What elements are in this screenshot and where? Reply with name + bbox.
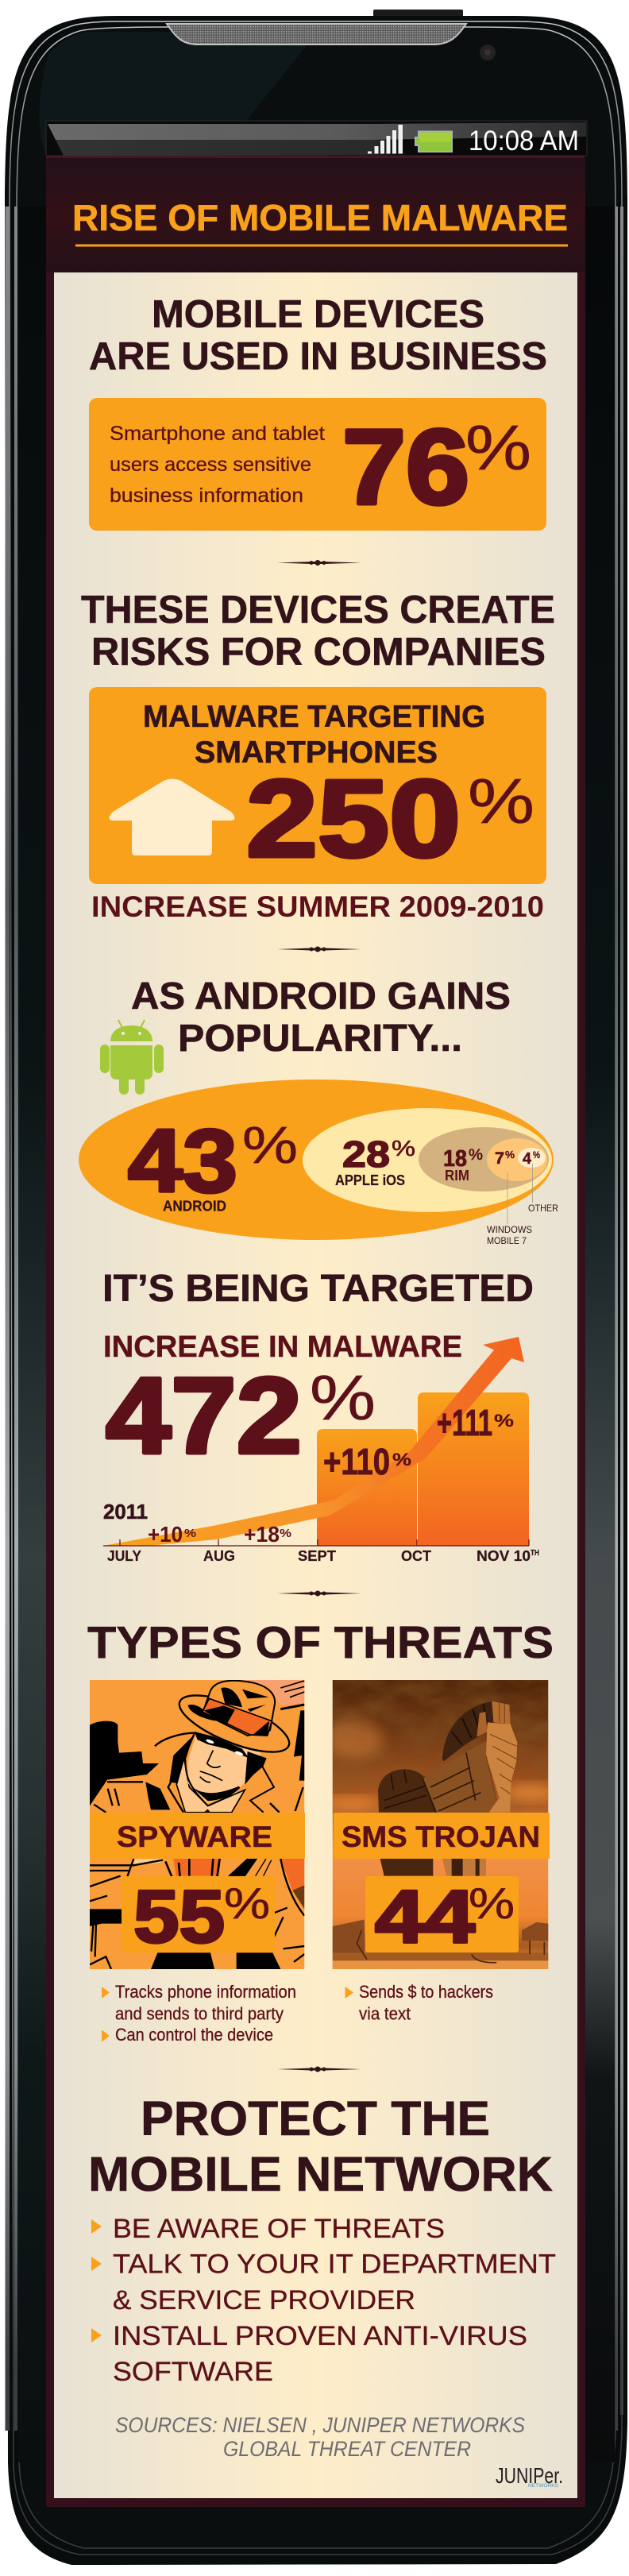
stat box: 55 percent: %: [224, 1879, 270, 1928]
action list: [91, 2214, 556, 2387]
trojan bullets: via text: [359, 2003, 411, 2024]
label band: [334, 1813, 550, 1859]
axis labels: NOV 10: [477, 1548, 531, 1564]
front camera: [480, 44, 496, 60]
label: spyware: SPYWARE: [117, 1821, 272, 1853]
card title: MALWARE TARGETING: [143, 700, 485, 734]
android 43 percent: 43: [128, 1111, 237, 1211]
action list: SOFTWARE: [113, 2357, 273, 2387]
arrow: growth trend: [103, 1337, 524, 1546]
value: +18 percent: +18: [244, 1522, 280, 1547]
stat card: 250 percent: [89, 687, 546, 884]
bar chart: malware growth: [103, 1337, 539, 1564]
icon: bullet: [102, 2030, 110, 2041]
card description: [110, 423, 325, 507]
juniper logo: NETWORKS: [528, 2484, 558, 2489]
value: +10 percent: %: [184, 1527, 196, 1540]
nested ellipse chart: platform share: [79, 1079, 554, 1240]
heading: protect the mobile network: [88, 2091, 553, 2201]
other 4 percent: %: [533, 1149, 540, 1161]
icon: bullet: [91, 2219, 102, 2234]
apple ios 28 percent: 28: [342, 1134, 390, 1175]
axis labels: AUG: [203, 1548, 235, 1564]
card description: Smartphone and tablet: [110, 423, 325, 445]
clock: 10:08 AM: [469, 125, 579, 156]
rim 18 percent: [443, 1146, 483, 1184]
icon: signal bars: [368, 125, 403, 154]
value: +110 percent: %: [392, 1450, 411, 1470]
472 percent stat: [106, 1355, 376, 1476]
label band: [90, 1813, 305, 1859]
action list: BE AWARE OF THREATS: [113, 2214, 445, 2244]
stat box: 55 percent: [122, 1875, 275, 1958]
472 percent stat: 472: [106, 1355, 302, 1476]
windows mobile 7 percent: [495, 1149, 515, 1168]
heading: these devices create risks: RISKS FOR COMPANIES: [91, 631, 546, 674]
callout: other: [528, 1164, 558, 1214]
heading: it's being targeted: IT’S BEING TARGETED: [102, 1268, 534, 1310]
spyware bullets: Can control the device: [115, 2025, 273, 2045]
panel: sms trojan: [322, 1680, 558, 1969]
axis labels: OCT: [401, 1548, 431, 1564]
spyware bullets: [102, 1982, 296, 2045]
value: +18 percent: %: [280, 1527, 291, 1540]
axis labels: JULY: [107, 1548, 141, 1564]
icon: bullet: [102, 1987, 110, 1999]
other 4 percent: 4: [523, 1150, 532, 1168]
divider ornament: [277, 2067, 361, 2072]
axis: [103, 1539, 529, 1546]
value: +111 percent: +111: [437, 1402, 492, 1443]
year label: 2011: [103, 1500, 148, 1524]
rim 18 percent: RIM: [445, 1168, 469, 1184]
card title: SMARTPHONES: [195, 736, 438, 770]
status bar: [46, 121, 587, 156]
percent sign: %: [465, 412, 531, 483]
heading: as android gains popularity: AS ANDROID GAINS: [131, 975, 511, 1018]
heading: these devices create risks: THESE DEVICES CREATE: [81, 589, 555, 631]
76 number: 76: [342, 408, 469, 527]
axis labels: [107, 1548, 539, 1564]
heading: as android gains popularity: POPULARITY...: [178, 1018, 462, 1060]
juniper logo: JUNIPer.: [496, 2463, 563, 2488]
heading: mobile devices are used in business: ARE USED IN BUSINESS: [89, 335, 547, 378]
apple ios 28 percent: %: [392, 1136, 415, 1161]
stat box: 44 percent: 44: [375, 1875, 475, 1958]
action list: & SERVICE PROVIDER: [113, 2285, 415, 2315]
heading: these devices create risks: [81, 589, 555, 674]
card title: [143, 700, 485, 770]
stat box: 44 percent: [365, 1875, 519, 1958]
action list: TALK TO YOUR IT DEPARTMENT: [113, 2250, 556, 2280]
subheading: increase in malware: INCREASE IN MALWARE: [103, 1330, 462, 1364]
axis labels: SEPT: [298, 1548, 336, 1564]
divider ornament: [277, 1590, 361, 1597]
action list: INSTALL PROVEN ANTI-VIRUS: [113, 2321, 527, 2351]
divider ornament: [277, 947, 361, 952]
callout: windows mobile 7: [487, 1172, 532, 1246]
other 4 percent: [523, 1149, 540, 1168]
panel: spyware: [90, 1680, 305, 1969]
rim 18 percent: %: [469, 1147, 483, 1164]
value: +110 percent: +110: [323, 1441, 390, 1482]
lower illustration: [133, 1859, 163, 1865]
value: +111 percent: %: [494, 1411, 514, 1431]
heading: mobile devices are used in business: MOBILE DEVICES: [152, 293, 484, 336]
title: RISE OF MOBILE MALWARE: [72, 197, 568, 238]
heading: protect the mobile network: MOBILE NETWORK: [88, 2147, 553, 2201]
rim 18 percent: 18: [443, 1146, 467, 1172]
sources: [115, 2413, 525, 2461]
divider ornament: [277, 560, 361, 566]
icon: bullet: [91, 2328, 102, 2342]
stat box: 44 percent: %: [469, 1879, 515, 1928]
icon: android robot: [100, 1020, 164, 1095]
apple ios 28 percent: [335, 1134, 415, 1188]
callout: other: OTHER: [528, 1203, 558, 1214]
icon: bullet: [91, 2257, 102, 2271]
250 number: 250: [246, 758, 461, 880]
illustration: trojan horse at sunset: [322, 1680, 558, 1969]
sources: SOURCES: NIELSEN , JUNIPER NETWORKS: [115, 2413, 525, 2437]
card description: business information: [110, 485, 303, 507]
callout: windows mobile 7: WINDOWS: [487, 1224, 532, 1235]
stat box: 55 percent: 55: [133, 1875, 225, 1958]
trojan bullets: [345, 1982, 493, 2024]
spyware bullets: and sends to third party: [115, 2003, 284, 2024]
value: +10 percent: +10: [148, 1522, 183, 1547]
caption: increase summer: INCREASE SUMMER 2009-2010: [91, 890, 544, 923]
android 43 percent: %: [242, 1115, 298, 1174]
callout: windows mobile 7: MOBILE 7: [487, 1235, 527, 1246]
icon: up arrow: [110, 778, 235, 855]
axis labels: TH: [531, 1549, 539, 1558]
heading: types of threats: TYPES OF THREATS: [87, 1617, 554, 1668]
heading: protect the mobile network: PROTECT THE: [141, 2091, 490, 2145]
trojan bullets: Sends $ to hackers: [359, 1982, 493, 2002]
android 43 percent: ANDROID: [163, 1198, 226, 1214]
speaker grille: [167, 24, 466, 44]
heading: as android gains popularity: [131, 975, 511, 1060]
icon: bullet: [345, 1987, 353, 1999]
card description: users access sensitive: [110, 454, 311, 476]
stat card: 76 percent: [89, 398, 546, 531]
heading: mobile devices are used in business: [89, 293, 547, 378]
sources: GLOBAL THREAT CENTER: [223, 2437, 471, 2461]
illustration: spy in fedora: [90, 1680, 304, 1969]
472 percent stat: %: [310, 1362, 376, 1433]
icon: battery: [415, 132, 452, 152]
app header: [46, 156, 585, 2507]
label: sms trojan: SMS TROJAN: [342, 1821, 540, 1853]
panel: screen content background: [54, 272, 577, 2498]
percent sign: %: [468, 766, 534, 836]
android 43 percent: [128, 1111, 298, 1214]
windows mobile 7 percent: %: [505, 1149, 515, 1161]
spyware bullets: Tracks phone information: [115, 1982, 296, 2002]
apple ios 28 percent: APPLE iOS: [335, 1172, 405, 1188]
windows mobile 7 percent: 7: [495, 1149, 504, 1168]
